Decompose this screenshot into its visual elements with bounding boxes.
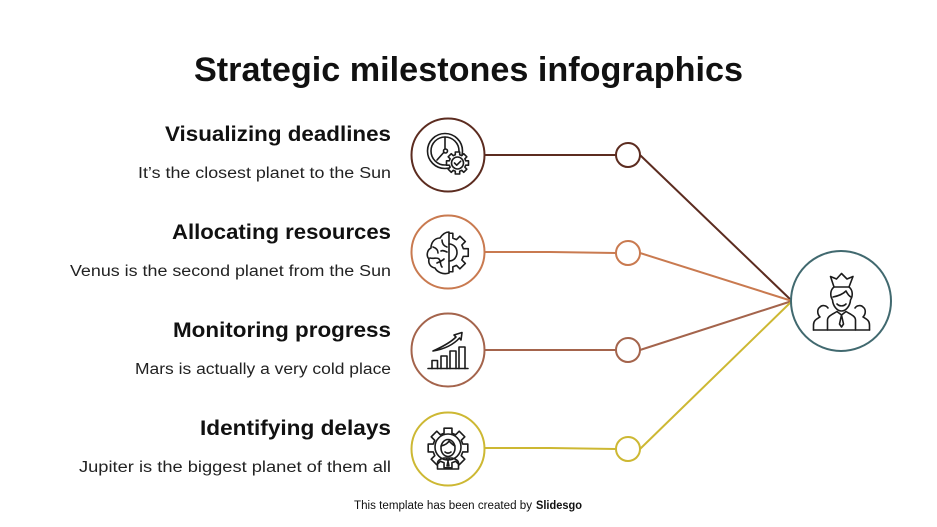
node: resources (616, 241, 640, 265)
milestone 3 text: Monitoring progress: Mars is actually a very cold place (135, 361, 391, 378)
milestone 1 text: Visualizing deadlines (138, 122, 391, 182)
milestone 3 text: Monitoring progress (135, 318, 391, 378)
milestone 2 text: Allocating resources: Venus is the second planet from the Sun (70, 263, 391, 280)
milestone 2 text: Allocating resources (70, 220, 391, 280)
node: deadlines (616, 143, 640, 167)
footer credit: Slidesgo (536, 500, 582, 512)
footer credit: This template has been created by (354, 500, 532, 512)
node: delays (616, 437, 640, 461)
milestone 4 text: Identifying delays: Identifying delays (200, 416, 391, 440)
milestone 4 text: Identifying delays (79, 416, 391, 476)
connector: resources to hub (485, 252, 792, 301)
connector: progress to hub (485, 301, 792, 350)
hub circle: leader with crown and team (791, 251, 891, 351)
milestone 4 text: Identifying delays: Jupiter is the biggest planet of them all (79, 459, 391, 476)
milestone 1 text: Visualizing deadlines: Visualizing deadlines (165, 122, 391, 146)
connector: deadlines to hub (485, 155, 792, 301)
icon circle: rising bar chart (412, 314, 484, 386)
milestone 3 text: Monitoring progress: Monitoring progress (173, 318, 391, 342)
title: Strategic milestones infographics (194, 51, 743, 89)
node: progress (616, 338, 640, 362)
icon circle: brain and gear (412, 216, 484, 288)
milestone 2 text: Allocating resources: Allocating resources (172, 220, 391, 244)
icon circle: person in gear (412, 412, 484, 486)
icon circle: clock and gear (412, 118, 484, 192)
connector: delays to hub (485, 301, 792, 449)
milestone 1 text: Visualizing deadlines: It’s the closest planet to the Sun (138, 165, 391, 182)
